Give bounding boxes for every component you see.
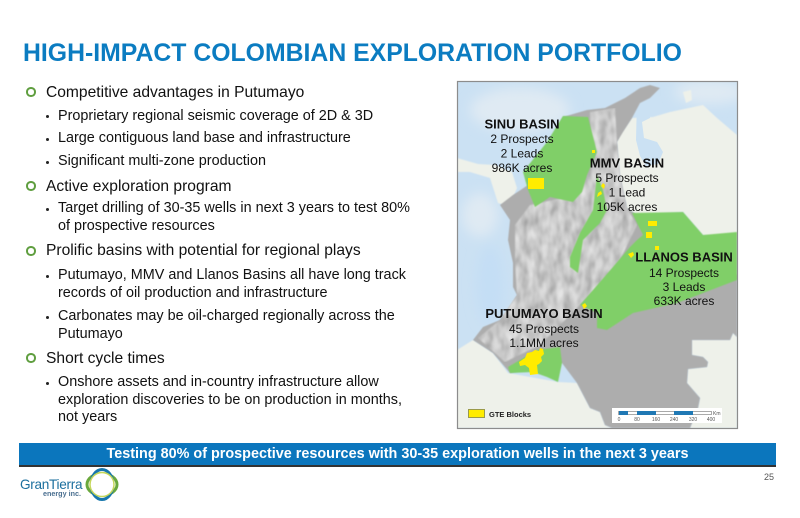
page number: 25 (764, 472, 774, 482)
Colombia grey landmass (473, 85, 737, 428)
label: Sinu Basin: SINU BASIN (484, 116, 560, 132)
bullet heading: competitive advantages: Competitive advantages in Putumayo (46, 84, 304, 101)
basin: MMV (570, 175, 607, 273)
text block: active exploration program (26, 178, 410, 234)
legend: GTE blocks (468, 410, 531, 419)
Lake Maracaibo (636, 116, 663, 166)
legend: GTE blocks: GTE Blocks (489, 410, 531, 419)
text block: prolific basins: Putumayo (58, 326, 123, 342)
bullet heading: prolific basins: Prolific basins with potential for regional plays (46, 242, 361, 259)
blocks: Putumayo north (582, 303, 587, 309)
land: Panama (457, 158, 517, 205)
blocks: Sinu (528, 178, 544, 189)
land: Brazil (687, 333, 737, 428)
scale bar: 320 (689, 417, 697, 423)
text block: short cycle times: exploration discoveries to be on production in months, (58, 392, 402, 408)
scale bar: 160 (652, 417, 660, 423)
scale bar: Km (713, 411, 720, 417)
logo tagline: energy inc. (43, 489, 81, 498)
label: Llanos Basin: 3 Leads (663, 280, 705, 294)
logo ring (86, 468, 118, 501)
text block: prolific basins: records of oil production and infrastructure (58, 284, 328, 300)
land: Ecuador and Peru (457, 340, 612, 428)
text block: prolific basins: Carbonates may be oil-charged regionally across the (58, 308, 395, 324)
Andes relief (478, 108, 637, 362)
title: HIGH-IMPACT COLOMBIAN EXPLORATION PORTFOLIO (23, 40, 682, 67)
label: Putumayo Basin: 1.1MM acres (509, 336, 579, 350)
label: Putumayo Basin: PUTUMAYO BASIN (485, 306, 603, 321)
scale bar: 0 (618, 417, 621, 423)
neighbouring land (457, 90, 737, 428)
text block: competitive advantages: Large contiguous land base and infrastructure (58, 130, 351, 146)
text block: short cycle times: not years (58, 409, 117, 425)
text block: short cycle times: Onshore assets and in-country infrastructure allow (58, 374, 379, 390)
GTE blocks (519, 150, 659, 375)
label: Sinu Basin (484, 116, 560, 175)
scale bar: 240 (670, 417, 678, 423)
label: Sinu Basin: 986K acres (492, 161, 552, 175)
label: Llanos Basin: 633K acres (654, 294, 714, 308)
land: Paraguana (683, 90, 692, 103)
bullet heading: short cycle: Short cycle times (46, 350, 165, 367)
callout banner: Testing 80% of prospective resources with 30-35 exploration wells in the next 3 years (107, 446, 688, 462)
text block: competitive advantages: Significant multi-zone production (58, 153, 266, 169)
map frame (458, 82, 738, 428)
basin polygons (508, 116, 737, 382)
bullet heading: active exploration: Active exploration program (46, 178, 231, 195)
logo wordmark: GranTierra (20, 477, 82, 492)
callout banner (19, 443, 776, 467)
text block: competitive advantages (26, 84, 373, 169)
map of Colombian basins (456, 80, 738, 430)
land: Venezuela (617, 105, 737, 240)
basin: Llanos (580, 212, 737, 330)
label: Sinu Basin: 2 Prospects (490, 132, 554, 146)
blocks: MMV and north (592, 150, 605, 197)
blocks: Llanos (628, 221, 659, 258)
label: MMV Basin: 5 Prospects (595, 171, 659, 185)
scale bar: 80 (634, 417, 640, 423)
basin: Sinu (523, 116, 597, 207)
scale bar: 400 (707, 417, 715, 423)
label: Llanos Basin (635, 250, 733, 308)
label: MMV Basin: 1 Lead (609, 186, 645, 200)
scale bar (612, 408, 722, 423)
text block: prolific basins (26, 242, 406, 342)
label: Sinu Basin: 2 Leads (501, 146, 543, 160)
label: MMV Basin: MMV BASIN (590, 156, 664, 170)
text block: prolific basins: Putumayo, MMV and Llanos Basins all have long track (58, 267, 406, 283)
label: Llanos Basin: 14 Prospects (649, 266, 719, 280)
label: MMV Basin: 105K acres (597, 200, 657, 214)
label: MMV Basin (590, 156, 664, 214)
text block: competitive advantages: Proprietary regional seismic coverage of 2D & 3D (58, 108, 373, 124)
text block: active exploration program: Target drilling of 30-35 wells in next 3 years to test 80% (58, 200, 410, 216)
text block: active exploration program: of prospective resources (58, 218, 215, 234)
label: Putumayo Basin (485, 306, 603, 350)
label: Putumayo Basin: 45 Prospects (509, 322, 579, 336)
basin: Putumayo (508, 347, 562, 382)
blocks: Putumayo (519, 348, 544, 375)
logo: GranTierra Energy (20, 468, 118, 501)
sea background (457, 81, 737, 428)
text block: short cycle times (26, 350, 402, 425)
label: Llanos Basin: LLANOS BASIN (635, 250, 733, 264)
